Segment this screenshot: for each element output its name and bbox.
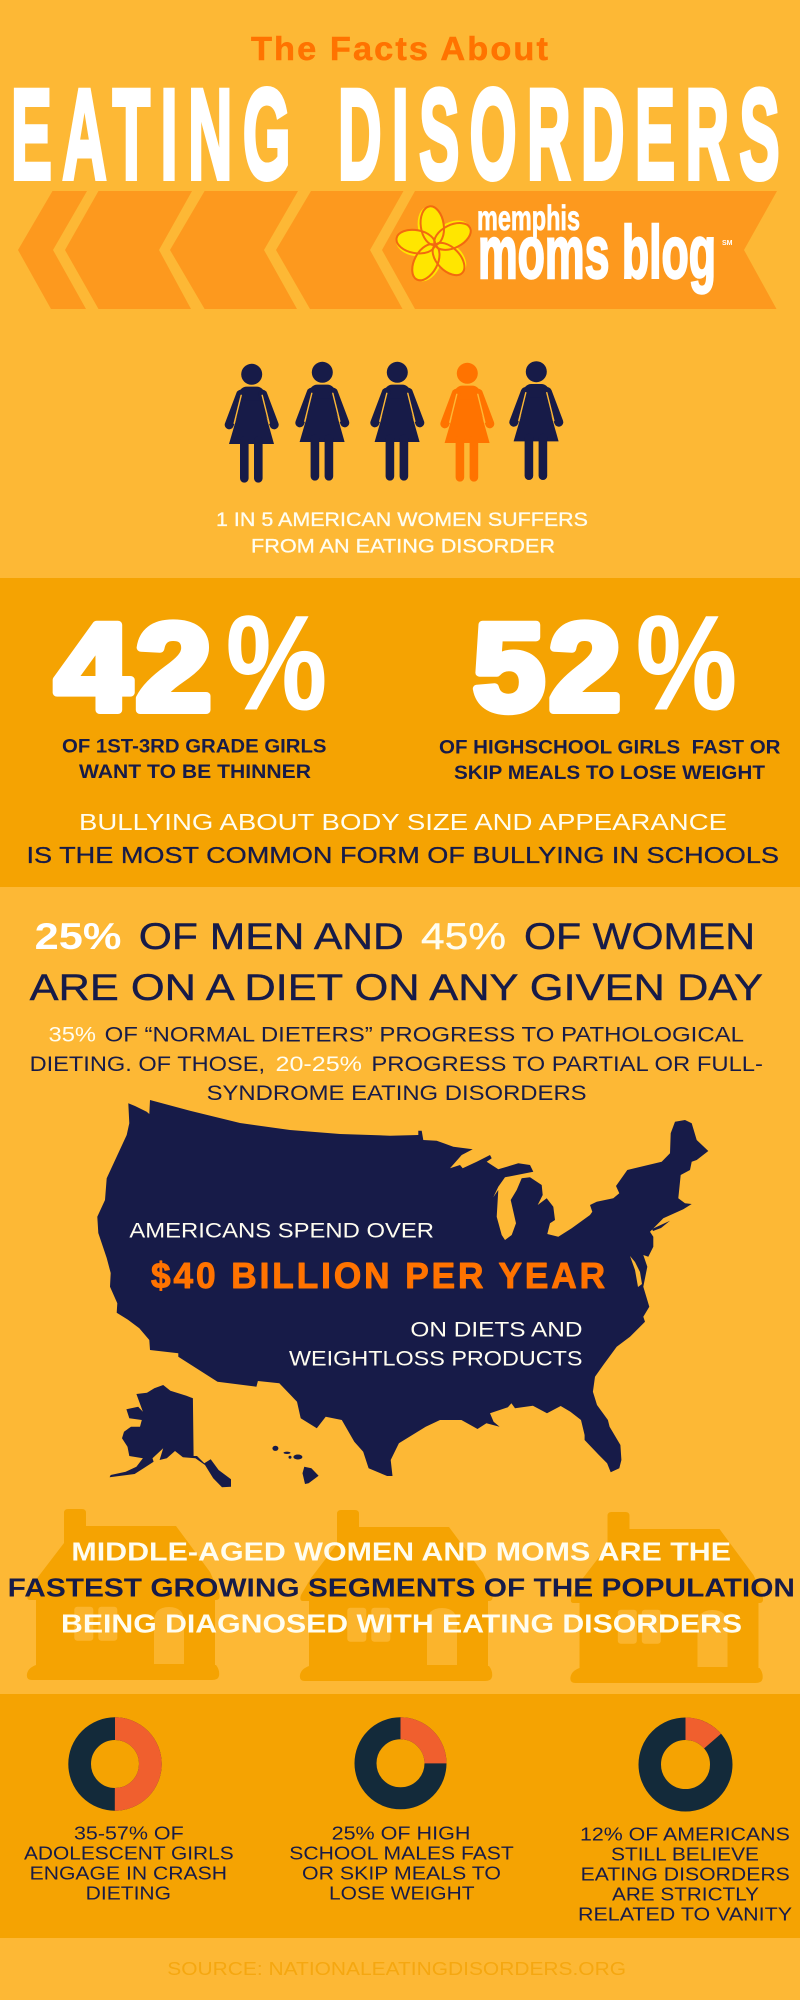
map: united states [97, 1100, 708, 1487]
text: normal dieters: SYNDROME EATING DISORDERS [207, 1081, 587, 1105]
stat: 42%: % [226, 589, 327, 738]
text: middle-aged women: FASTEST GROWING SEGMENTS OF THE POPULATION [8, 1573, 795, 1603]
map text: americans spend over: AMERICANS SPEND OVER [129, 1219, 434, 1242]
title: eating disorders: EATING [11, 64, 301, 206]
map text: on diets [289, 1319, 582, 1371]
stat: 42% [55, 589, 327, 738]
caption: donut 2: OR SKIP MEALS TO [302, 1864, 501, 1884]
map: mainland [97, 1100, 708, 1476]
caption: donut 1: 35-57% OF [74, 1824, 184, 1844]
icon: flower [394, 205, 475, 286]
bullying statement: BULLYING ABOUT BODY SIZE AND APPEARANCE [79, 809, 727, 835]
stat: 42%: 42 [55, 599, 216, 737]
caption: 1 in 5 [216, 509, 588, 558]
stat: 52% [473, 589, 737, 738]
map: long island [652, 1221, 670, 1231]
heading: men and women dieting: ARE ON A DIET ON ANY GIVEN DAY [30, 967, 763, 1008]
logo: memphis moms blog [394, 199, 733, 294]
map text: 40 billion per year: $40 BILLION PER YEAR [151, 1255, 608, 1296]
caption: donut 1: ENGAGE IN CRASH [30, 1864, 227, 1884]
text: normal dieters: OF “NORMAL DIETERS” PROGRESS TO PATHOLOGICAL [105, 1023, 744, 1047]
caption: donut 2 [289, 1824, 514, 1904]
chevron banner [18, 191, 777, 309]
caption: donut 3: RELATED TO VANITY [578, 1905, 792, 1925]
caption: donut 2: 25% OF HIGH [332, 1824, 470, 1844]
icon: women row [229, 361, 559, 483]
text: normal dieters: 35% [48, 1023, 96, 1047]
stat: 52%: 52 [473, 599, 625, 737]
stat text: 52% [439, 736, 780, 784]
map text: on diets: ON DIETS AND [410, 1319, 582, 1342]
text: normal dieters: PROGRESS TO PARTIAL OR FULL- [371, 1052, 763, 1076]
text: normal dieters: DIETING. OF THOSE, [30, 1052, 265, 1076]
source: SOURCE: NATIONALEATINGDISORDERS.ORG [167, 1959, 626, 1979]
text: middle-aged women: BEING DIAGNOSED WITH EATING DISORDERS [61, 1609, 742, 1639]
heading: the facts about: The Facts About [251, 30, 550, 67]
chart: donut 3 [650, 1729, 721, 1800]
panel: middle-aged women [8, 1509, 795, 1683]
panel: percent band [0, 578, 800, 887]
caption: donut 3 [578, 1825, 792, 1925]
caption: donut 3: STILL BELIEVE [611, 1845, 759, 1865]
heading: men and women dieting: 45% [421, 916, 506, 957]
caption: donut 1: ADOLESCENT GIRLS [24, 1844, 234, 1864]
icon: houses [27, 1509, 763, 1683]
panel: header [11, 30, 790, 309]
caption: donut 3: 12% OF AMERICANS [580, 1825, 790, 1845]
map: hawaii [272, 1446, 319, 1484]
bullying statement: IS THE MOST COMMON FORM OF BULLYING IN SCHOOLS [26, 842, 779, 868]
map: chesapeake bay [630, 1256, 642, 1287]
stat text: 42%: WANT TO BE THINNER [79, 761, 311, 783]
caption: 1 in 5: FROM AN EATING DISORDER [251, 536, 555, 558]
stat: 52%: % [636, 589, 737, 738]
heading: men and women dieting: OF MEN AND [139, 916, 404, 957]
chart: donut 2 [366, 1728, 436, 1798]
panel: 1 in 5 women [216, 361, 588, 558]
stat text: 42% [62, 736, 326, 783]
panel: dieting statistics [30, 916, 763, 1105]
text: middle-aged women: MIDDLE-AGED WOMEN AND MOMS ARE THE [71, 1537, 731, 1567]
caption: donut 3: ARE STRICTLY [612, 1885, 759, 1905]
bullying statement [26, 809, 779, 868]
logo: memphis moms blog: memphis [477, 199, 580, 238]
text: normal dieters: 20-25% [276, 1052, 362, 1076]
heading: men and women dieting [30, 916, 763, 1008]
map text: on diets: WEIGHTLOSS PRODUCTS [289, 1348, 582, 1371]
heading: men and women dieting: 25% [35, 916, 121, 957]
caption: donut 1 [24, 1824, 234, 1904]
chart: donut 1 [80, 1729, 150, 1799]
text: middle-aged women [8, 1537, 795, 1639]
caption: donut 3: EATING DISORDERS [581, 1865, 790, 1885]
map: alaska [110, 1385, 231, 1487]
stat text: 42%: OF 1ST-3RD GRADE GIRLS [62, 736, 326, 758]
caption: donut 2: LOSE WEIGHT [329, 1884, 475, 1904]
stat text: 52%: OF HIGHSCHOOL GIRLS FAST OR [439, 736, 780, 758]
caption: donut 1: DIETING [86, 1884, 171, 1904]
heading: men and women dieting: OF WOMEN [524, 916, 755, 957]
caption: 1 in 5: 1 IN 5 AMERICAN WOMEN SUFFERS [216, 509, 588, 531]
caption: donut 2: SCHOOL MALES FAST [289, 1844, 514, 1864]
logo: memphis moms blog: SM [722, 240, 733, 247]
panel: donut band [0, 1694, 800, 1938]
text: normal dieters [30, 1023, 763, 1105]
stat text: 52%: SKIP MEALS TO LOSE WEIGHT [454, 762, 765, 784]
